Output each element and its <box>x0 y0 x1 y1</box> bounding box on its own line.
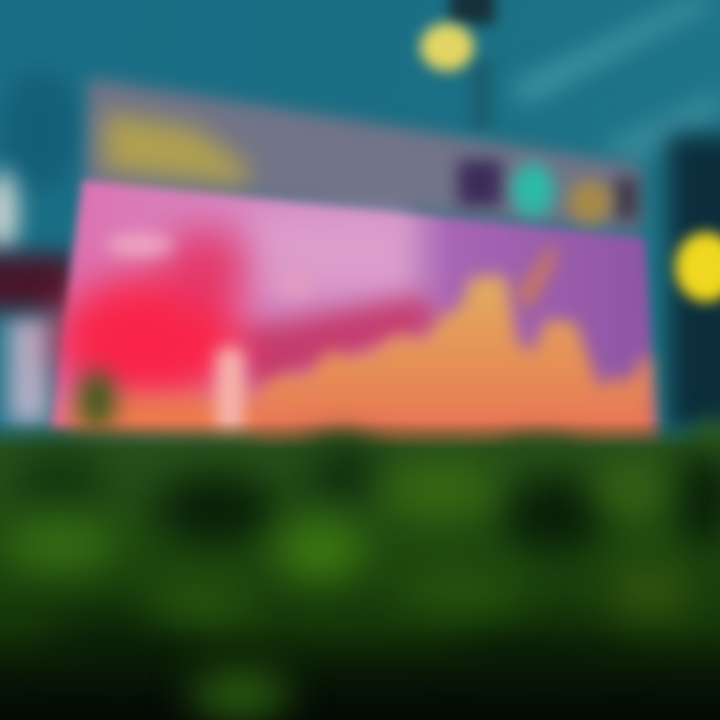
orange icon <box>568 180 612 224</box>
top band <box>85 78 640 232</box>
lamp housing <box>450 0 495 130</box>
bright leaf patches <box>5 465 690 620</box>
dark column <box>668 135 720 430</box>
dark icon block <box>458 160 638 220</box>
yellow heading <box>104 112 250 185</box>
top band icons <box>458 160 638 224</box>
light beams upper right <box>0 0 720 190</box>
main pink purple panel <box>50 180 657 445</box>
dark rose band <box>235 295 445 395</box>
dark lower edge <box>0 625 720 720</box>
lower leaf patch <box>190 671 290 719</box>
dark leaf patches <box>15 447 720 670</box>
foliage <box>0 370 720 720</box>
white column <box>216 348 244 433</box>
left side objects <box>0 170 76 425</box>
lighter pink area <box>250 215 405 290</box>
chart peak streak <box>515 245 558 310</box>
white post <box>0 170 50 425</box>
yellow light <box>675 232 720 302</box>
foliage base <box>0 420 720 720</box>
right dark panel <box>668 135 720 430</box>
dark red band <box>0 254 76 310</box>
red shape <box>55 228 247 405</box>
bush top <box>79 370 720 464</box>
area chart silhouette <box>255 275 656 455</box>
white highlights <box>106 234 313 297</box>
lamp fixture <box>420 0 495 130</box>
orange lower glow <box>60 395 280 445</box>
billboard <box>50 78 657 455</box>
teal circle <box>511 163 555 217</box>
lamp glow <box>420 23 474 71</box>
